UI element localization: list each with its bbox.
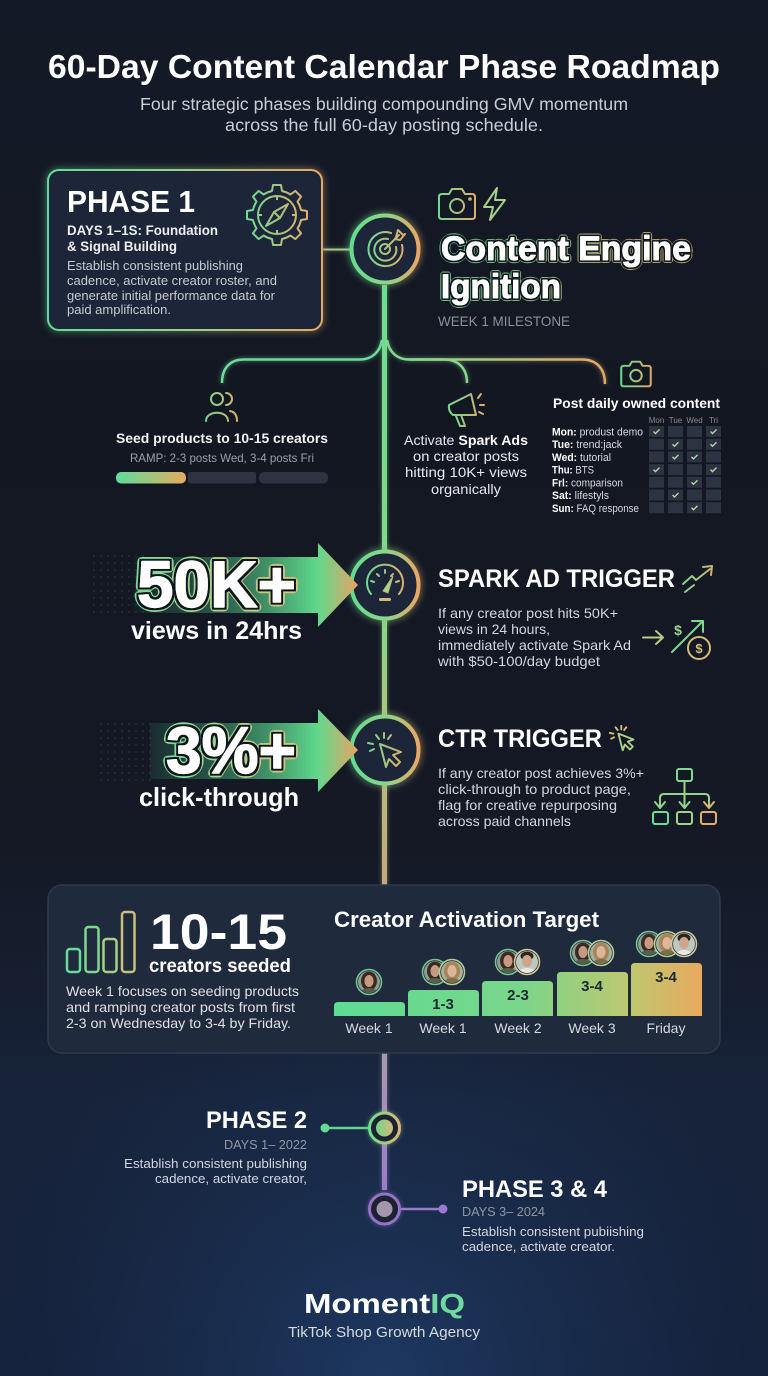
spark ad description: immediately activate Spark Ad: [438, 637, 631, 653]
heading: Content Engine Ignition: Content Engine: [441, 230, 691, 268]
ctr description: If any creator post achieves 3%+: [438, 765, 644, 781]
spark ads text: on creator posts: [413, 448, 519, 464]
phase 3 and 4 text: [462, 1176, 644, 1254]
ctr description: flag for creative repurposing: [438, 797, 617, 813]
stat caption: views in 24hrs: [131, 617, 302, 645]
bar values: 1-3: [432, 996, 454, 1013]
stat caption: creators seeded: [149, 955, 291, 977]
footer logo: Moment IQ: [304, 1288, 465, 1319]
bar values: 2-3: [507, 987, 529, 1004]
phase 1 description: [67, 258, 277, 317]
bar values: 3-4: [581, 978, 603, 995]
bar labels: Friday: [647, 1020, 685, 1036]
subtitle: Four strategic phases building compounding GMV momentum: [140, 94, 628, 114]
big stat 3%+: 3%+: [166, 713, 296, 787]
calendar heading: Post daily owned content: [553, 395, 720, 411]
trigger row: 50K: [88, 543, 358, 645]
icon: flow chart: [653, 769, 716, 824]
chart title: Creator Activation Target: [334, 907, 600, 932]
icon: megaphone: [449, 394, 484, 426]
calendar row labels: Thu: BTS: [552, 464, 594, 476]
bar chart: [334, 932, 702, 1036]
phase 1 heading: PHASE 1: [67, 184, 195, 219]
seed heading: Seed products to 10-15 creators: [116, 430, 328, 446]
calendar column labels: Mon: [649, 416, 664, 425]
halftone dots: [95, 720, 155, 782]
ctr description: [438, 765, 644, 829]
calendar check marks: [654, 430, 716, 510]
icon: camera: [439, 189, 475, 219]
phase 3 and 4 marker: [370, 1194, 448, 1224]
spark ads text: Activate Spark Ads: [404, 432, 528, 448]
bars: [334, 963, 702, 1016]
branch connectors: [222, 340, 605, 384]
calendar row labels: Tue: trend:jack: [552, 439, 622, 451]
stat caption: click-through: [139, 782, 299, 812]
heading: Content Engine Ignition: [441, 230, 691, 306]
halftone dots: [88, 555, 148, 617]
bar values: 3-4: [655, 969, 677, 986]
milestone label: WEEK 1 MILESTONE: [438, 313, 570, 329]
spark ad description: with $50-100/day budget: [437, 653, 600, 669]
ctr description: across paid channels: [438, 813, 571, 829]
calendar column labels: Tue: [669, 416, 683, 425]
arrow: [130, 543, 358, 627]
bar labels: Week 3: [568, 1020, 616, 1036]
subtitle: [140, 94, 628, 135]
phase 3 and 4 text: DAYS 3– 2024: [462, 1204, 545, 1219]
phase 1 description: cadence, activate creator roster, and: [67, 273, 277, 288]
ramp text: RAMP: 2-3 posts Wed, 3-4 posts Fri: [130, 451, 314, 465]
phase 1 subheading: [67, 222, 218, 254]
title: 60-Day Content Calendar Phase Roadmap: [48, 48, 720, 85]
creator avatars: [356, 932, 696, 1000]
central timeline line: [382, 285, 387, 1190]
icon: small camera: [621, 362, 651, 386]
icon: arrow to dollar: [643, 621, 710, 659]
stat description: [66, 983, 299, 1031]
trigger text: spark ad: [437, 565, 712, 669]
calendar row labels: Sat: lifestyls: [552, 490, 609, 502]
icon: lightning bolt: [484, 188, 505, 220]
phase 1 description: generate initial performance data for: [67, 288, 276, 303]
footer tagline: TikTok Shop Growth Agency: [288, 1324, 481, 1341]
icon: trending arrow: [683, 566, 712, 592]
calendar row labels: Wed: tutorial: [552, 452, 611, 464]
icon: gear compass: [247, 185, 307, 245]
bar labels: Week 1: [419, 1020, 467, 1036]
calendar row labels: Frl: comparison: [552, 478, 623, 490]
phase 2 marker: [320, 1113, 400, 1143]
arrow: [150, 709, 358, 792]
action: spark ads: [404, 394, 528, 497]
heading: Content Engine Ignition: Ignition: [441, 268, 561, 306]
calendar grid: [649, 426, 721, 513]
phase 2 text: [124, 1107, 307, 1186]
trigger text: ctr: [438, 725, 716, 829]
phase 3 and 4 text: cadence, activate creator.: [462, 1239, 615, 1254]
calendar row labels: Mon: produst demo: [552, 426, 643, 438]
calendar column labels: Wed: [686, 416, 703, 425]
node: gauge: [352, 552, 418, 618]
bar values: [432, 969, 677, 1013]
heading: Content Engine Ignition: Ignition: [441, 268, 561, 306]
spark ads text: [404, 432, 528, 497]
stat description: 2-3 on Wednesday to 3-4 by Friday.: [66, 1015, 291, 1031]
spark ad description: views in 24 hours,: [438, 621, 550, 637]
big stat 50K+: 50K+: [137, 547, 296, 621]
heading: Content Engine Ignition: Content Engine: [441, 230, 691, 268]
phase 2 text: cadence, activate creator,: [155, 1171, 307, 1186]
icon: arrow to dollar: $: [695, 641, 703, 656]
panel: creator activation: [48, 885, 720, 1053]
phase 1 subheading: DAYS 1–1S: Foundation: [67, 222, 218, 238]
phase 1 description: Establish consistent publishing: [67, 258, 243, 273]
big stat 3%+: 3%+: [166, 713, 296, 787]
stat description: Week 1 focuses on seeding products: [66, 983, 299, 999]
phase 2 text: PHASE 2: [206, 1107, 307, 1134]
stat 10-15: 10-15: [150, 904, 287, 960]
icon: speedometer: [367, 565, 403, 601]
phase 3 and 4 text: Establish consistent pubiishing: [462, 1224, 644, 1239]
icon: target with arrow: [368, 230, 405, 266]
bar labels: Week 1: [345, 1020, 393, 1036]
phase 1 description: paid amplification.: [67, 302, 171, 317]
phase 2 text: DAYS 1– 2022: [224, 1137, 307, 1152]
ctr heading: CTR TRIGGER: [438, 725, 602, 753]
icon: bar outline chart: [67, 912, 134, 972]
spark ad description: [437, 605, 631, 669]
progress bar: [116, 472, 328, 484]
panel: phase 1: [48, 170, 322, 330]
icon: cursor click: [368, 733, 401, 767]
spark ads text: hitting 10K+ views: [405, 464, 527, 480]
node: cursor: [352, 716, 418, 784]
icon: arrow to dollar: $: [674, 622, 682, 638]
stat description: and ramping creator posts from first: [66, 999, 295, 1015]
bar labels: [345, 1020, 685, 1036]
calendar row labels: Sun: FAQ response: [552, 503, 639, 515]
calendar row labels: [552, 426, 643, 515]
phase 2 text: Establish consistent publishing: [124, 1156, 307, 1171]
connector phase 1 to node: [322, 248, 352, 250]
action: daily owned content: [552, 362, 721, 515]
node: target: [352, 216, 418, 282]
spark ads text: organically: [431, 481, 501, 497]
spark ad description: If any creator post hits 50K+: [438, 605, 618, 621]
bar labels: Week 2: [494, 1020, 542, 1036]
icon: small cursor: [610, 726, 634, 750]
action: seed products: [116, 393, 328, 484]
big stat 50K+: 50K+: [137, 547, 296, 621]
phase 1 subheading: & Signal Building: [67, 238, 177, 254]
spark ad heading: SPARK AD TRIGGER: [438, 565, 675, 593]
subtitle: across the full 60-day posting schedule.: [225, 115, 543, 135]
trigger row: 3%: [95, 709, 358, 812]
icon: users: [206, 393, 237, 421]
calendar column labels: Tri: [709, 416, 718, 425]
phase 3 and 4 text: PHASE 3 & 4: [462, 1176, 608, 1203]
ctr description: click-through to product page,: [438, 781, 631, 797]
calendar column labels: [649, 416, 718, 425]
